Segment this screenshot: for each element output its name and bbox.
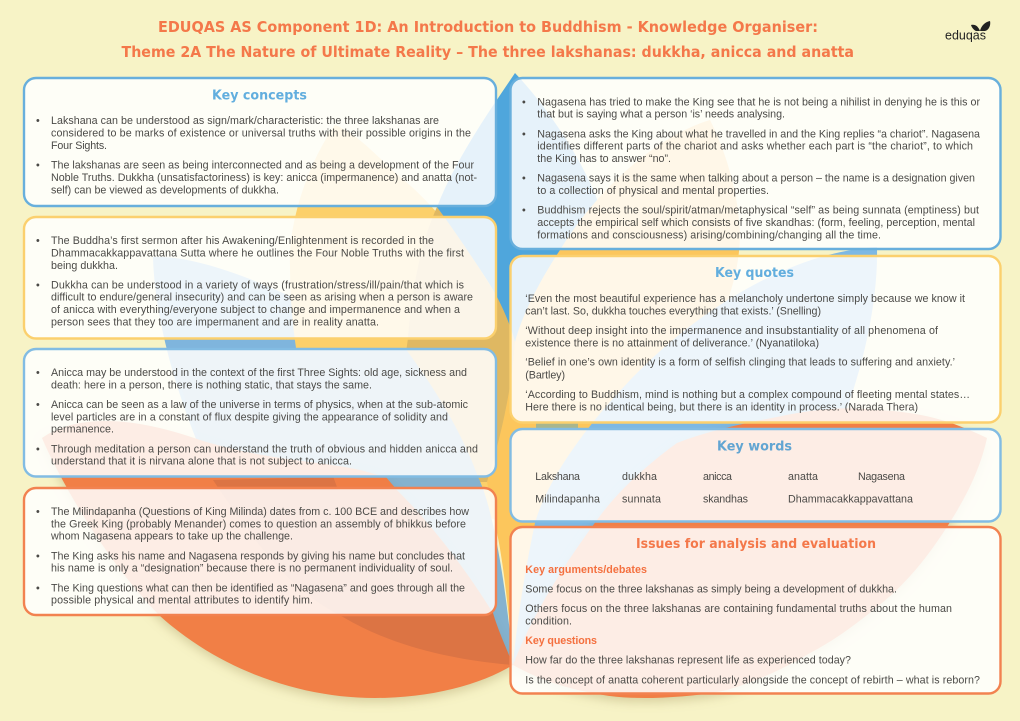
text: dukkha bullets: difficult to endure/general insecurity) and can be seen as arising when a person is aware [51, 292, 473, 304]
text: nagasena bullets: to a collection of physical and mental properties. [537, 185, 769, 197]
text: dukkha bullets: • [36, 235, 40, 247]
text: milindapanha bullets: the Greek King (probably Menander) comes to question an assembly of bhikkus before [51, 518, 466, 530]
text: key words list: anicca [703, 471, 732, 483]
text: quotes: (Bartley) [525, 369, 565, 381]
petal: dark orange overlap lower [213, 477, 513, 665]
text: quotes: Here there is no identical being, but there is an identity in process.’ (Narada Thera) [525, 401, 918, 413]
text: nagasena bullets: Buddhism rejects the soul/spirit/atman/metaphysical “self” as being sunnata (emptiness) but [537, 205, 979, 217]
text: dukkha bullets: of anicca with everything/everyone subject to change and impermanence and when a [51, 304, 460, 316]
text: dukkha bullets: Dukkha can be understood in a variety of ways (frustration/stress/ill/pain/that which is [51, 279, 464, 291]
panel: anicca [24, 349, 496, 476]
text: quotes: existence there is no attainment of deliverance.’ (Nyanatiloka) [525, 338, 819, 350]
text: quotes [525, 293, 970, 413]
heading: issues: Issues for analysis and evaluation [636, 536, 876, 552]
text: milindapanha bullets: The King questions what can then be identified as “Nagasena” and goes through all the [51, 582, 465, 594]
text: anicca bullets: Anicca may be understood in the context of the first Three Sights: old age, sickness and [51, 367, 467, 379]
text: quotes: ‘Even the most beautiful experience has a melancholy undertone simply because we know it [525, 293, 965, 305]
text: key concepts bullets: • [36, 115, 40, 127]
text: nagasena bullets: Nagasena says it is the same when talking about a person – the name is a designation given [537, 173, 975, 185]
text: anicca bullets [36, 367, 478, 468]
text: key words list: Nagasena [858, 471, 905, 483]
text: key words list [535, 471, 913, 506]
text: key words list: Lakshana [535, 471, 580, 483]
panel: dukkha [24, 217, 496, 338]
text: arguments [525, 583, 952, 627]
text: nagasena bullets: that but is saying what a person ‘is’ needs analysing. [537, 109, 785, 121]
text: anicca bullets: understand that it is nirvana alone that is not subject to anicca. [51, 456, 352, 468]
petal: left blue lower [167, 348, 513, 665]
panel: key quotes [510, 256, 1000, 422]
text: key concepts bullets: Four Sights. [51, 140, 107, 152]
text: key concepts bullets: Lakshana can be understood as sign/mark/characteristic: the three lakshanas are [51, 115, 439, 127]
text: milindapanha bullets [36, 506, 469, 607]
text: arguments: condition. [525, 615, 572, 627]
petal: right blue [513, 247, 877, 665]
petal: left blue [153, 257, 405, 477]
text: milindapanha bullets: The Milindapanha (Questions of King Milinda) dates from c. 100 BCE and describes how [51, 506, 469, 518]
text: nagasena bullets: • [522, 205, 526, 217]
text: nagasena bullets: formations and consciousness) arising/combining/changing all the time. [537, 229, 881, 241]
text: nagasena bullets: accepts the empirical self which consists of five skandhas: (form, feeling, perception, mental [537, 217, 975, 229]
text: nagasena bullets: • [522, 96, 526, 108]
title [122, 18, 854, 61]
petal: tan overlap of yellow and blue [405, 207, 515, 482]
text: nagasena bullets: • [522, 128, 526, 140]
panel: milindapanha [24, 488, 496, 615]
text: key concepts bullets: Noble Truths. Dukkha (unsatisfactoriness) is key: anicca (impermanence) and anatta (not- [51, 172, 477, 184]
heading: key words: Key words [717, 439, 792, 455]
text: milindapanha bullets: possible physical and mental attributes to identify him. [51, 595, 313, 607]
subheading: key arguments: Key arguments/debates [525, 564, 647, 576]
title: EDUQAS AS Component 1D: An Introduction to Buddhism - Knowledge Organiser: [158, 18, 818, 36]
text: milindapanha bullets: • [36, 550, 40, 562]
text: dukkha bullets: Dhammacakkappavattana Sutta where he outlines the Four Noble Truths with the first [51, 247, 464, 259]
panel: nagasena [510, 78, 1000, 249]
text: anicca bullets: death: here in a person, there is nothing static, that stays the same. [51, 379, 372, 391]
text: arguments: Others focus on the three lakshanas are containing fundamental truths about the human [525, 603, 952, 615]
panel: key words [510, 429, 1000, 522]
text: dukkha bullets [36, 235, 473, 328]
title: Theme 2A The Nature of Ultimate Reality – The three lakshanas: dukkha, anicca and anatta [122, 43, 854, 61]
text: nagasena bullets [522, 96, 980, 241]
text: quotes: ‘Without deep insight into the impermanence and insubstantiality of all phenomena of [525, 325, 938, 337]
text: questions: How far do the three lakshanas represent life as experienced today? [525, 655, 851, 667]
text: anicca bullets: permanence. [51, 424, 114, 436]
petal: orange strip [333, 476, 397, 490]
logo: eduqas: eduqas [945, 28, 986, 42]
text: key words list: skandhas [703, 494, 748, 506]
text: anicca bullets: level particles are in a constant of flux despite giving the appearance of solidity and [51, 411, 448, 423]
text: nagasena bullets: Nagasena has tried to make the King see that he is not being a nihilist in denying he is this or [537, 96, 980, 108]
heading: key quotes: Key quotes [715, 265, 794, 281]
text: dukkha bullets: person sees that they too are impermanent and are in reality anatta. [51, 316, 379, 328]
text: key concepts bullets: • [36, 160, 40, 172]
text: nagasena bullets: • [522, 173, 526, 185]
text: key concepts bullets: The lakshanas are seen as being interconnected and as being a development of the Four [51, 160, 474, 172]
text: milindapanha bullets: • [36, 506, 40, 518]
text: quotes: ‘According to Buddhism, mind is nothing but a complex compound of fleeting mental states… [525, 389, 970, 401]
text: anicca bullets: • [36, 443, 40, 455]
petal: left yellow [290, 125, 515, 520]
text: dukkha bullets: • [36, 279, 40, 291]
heading: key concepts: Key concepts [212, 88, 307, 104]
text: key words list: Dhammacakkappavattana [788, 494, 913, 506]
text: quotes: can’t last. So, dukkha touches everything that exists.’ (Snelling) [525, 306, 821, 318]
text: key words list: Milindapanha [535, 494, 600, 506]
petal: blue and yellow strip [536, 421, 578, 429]
text: dukkha bullets: being dukkha. [51, 260, 118, 272]
text: milindapanha bullets: The King asks his name and Nagasena responds by giving his name but concludes that [51, 550, 465, 562]
subheading: key questions: Key questions [525, 635, 597, 647]
text: milindapanha bullets: whom Nagasena appears to take up the challenge. [50, 531, 293, 543]
text: anicca bullets: • [36, 399, 40, 411]
text: key words list: anatta [788, 471, 818, 483]
text: key concepts bullets [36, 115, 477, 196]
text: questions: Is the concept of anatta coherent particularly alongside the concept of rebirth – what is reborn? [525, 674, 980, 686]
text: nagasena bullets: identifies different parts of the chariot and asks whether each part is “the chariot”, to which [537, 141, 973, 153]
panel: issues for analysis and evaluation [510, 527, 1000, 694]
text: key concepts bullets: self) can be viewed as developments of dukkha. [51, 184, 279, 196]
text: nagasena bullets: the King has to answer “no”. [537, 153, 671, 165]
text: anicca bullets: Anicca can be seen as a law of the universe in terms of physics, when at the sub-atomic [51, 399, 469, 411]
petal: right yellow [487, 120, 740, 665]
petal: right orange [513, 408, 987, 698]
text: questions [525, 655, 980, 686]
text: key words list: dukkha [622, 471, 657, 483]
text: key concepts bullets: considered to be marks of existence or universal truths with their possible origins in the [51, 128, 471, 140]
text: milindapanha bullets: his name is only a “designation” because there is no permanent individuality of soul. [51, 563, 453, 575]
petal: central tall blue [408, 73, 625, 345]
text: anicca bullets: • [36, 367, 40, 379]
text: anicca bullets: Through meditation a person can understand the truth of obvious and hidden anicca and [51, 443, 478, 455]
panel: key concepts [24, 78, 496, 206]
logo: eduqas [945, 21, 990, 42]
text: arguments: Some focus on the three lakshanas as simply being a development of dukkha. [525, 583, 897, 595]
text: milindapanha bullets: • [36, 582, 40, 594]
text: quotes: ‘Belief in one’s own identity is a form of selfish clinging that leads to suffering and anxiety.’ [525, 357, 955, 369]
text: nagasena bullets: Nagasena asks the King about what he travelled in and the King replies “a chariot”. Nagasena [537, 128, 980, 140]
text: dukkha bullets: The Buddha’s first sermon after his Awakening/Enlightenment is recorded in the [51, 235, 434, 247]
petal: left orange [42, 421, 513, 698]
text: key words list: sunnata [622, 494, 661, 506]
